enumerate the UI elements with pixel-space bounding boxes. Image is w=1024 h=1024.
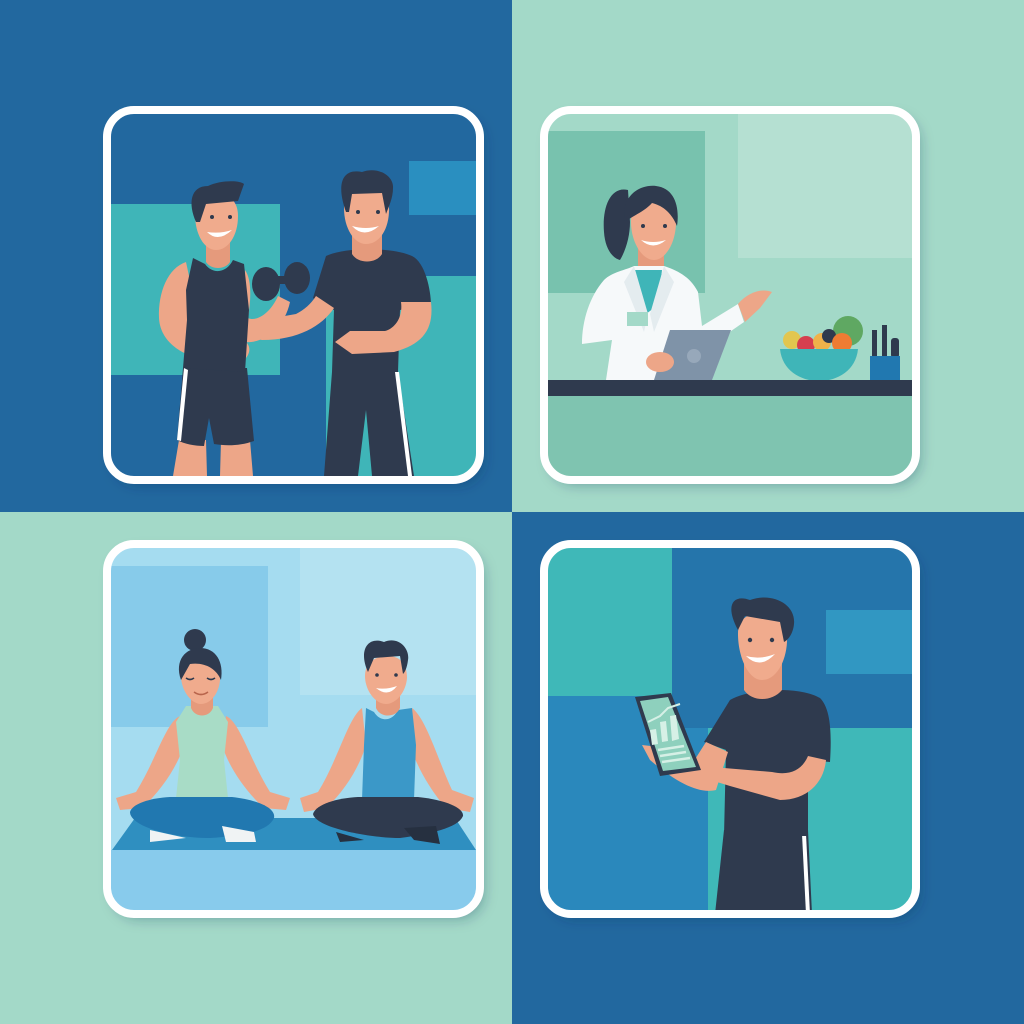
figure: doctor — [582, 186, 772, 380]
panel: progress tracking — [544, 544, 916, 914]
panel: meditation — [107, 544, 480, 914]
figure: woman meditating — [116, 629, 290, 842]
icon: tablet with chart — [635, 693, 701, 776]
icon: tablet — [646, 330, 731, 380]
icon: dumbbell — [252, 262, 310, 301]
icon: pen holder — [870, 325, 900, 381]
figure: man with tablet — [642, 597, 831, 914]
figure: trainer — [252, 170, 432, 476]
desk — [544, 380, 916, 396]
figure: man lifting dumbbell — [159, 181, 290, 476]
figure: man meditating — [300, 640, 474, 844]
icon: fruit bowl — [780, 316, 863, 381]
yoga mat — [112, 818, 476, 850]
panel: nutritionist — [544, 110, 916, 480]
panel: trainer and dumbbell — [107, 110, 480, 480]
